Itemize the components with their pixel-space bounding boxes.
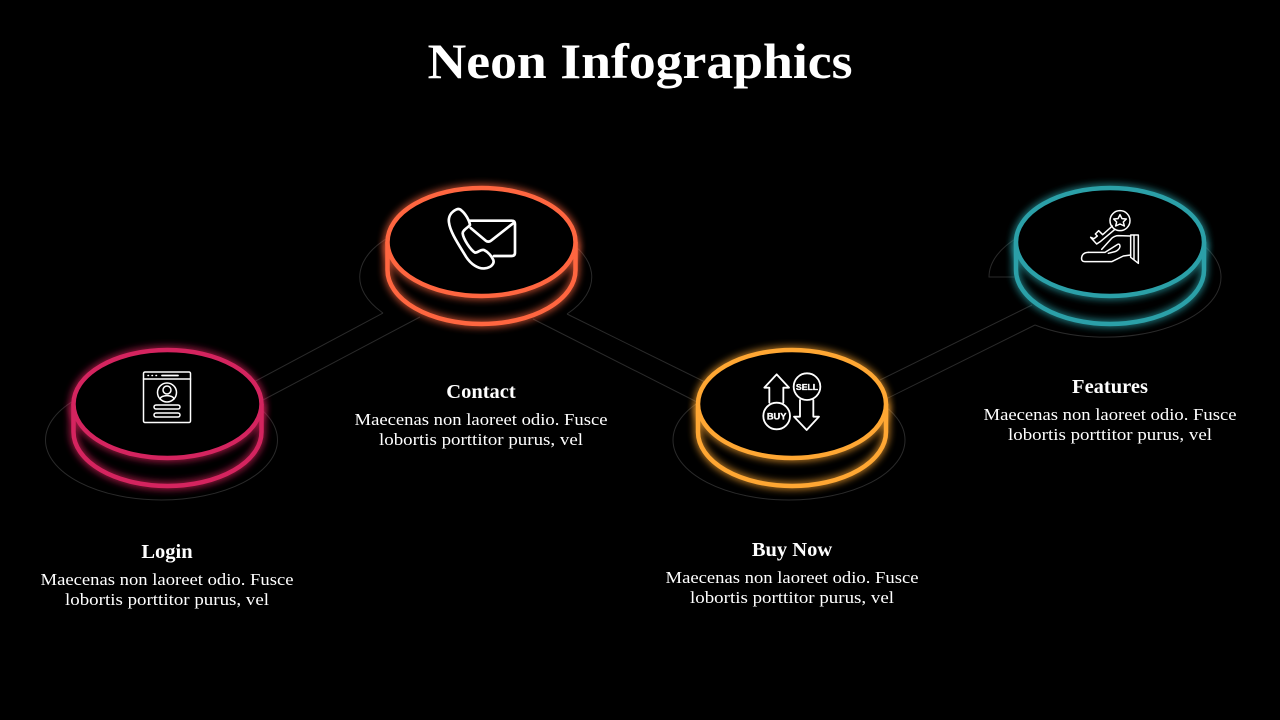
text block: login: lobortis porttitor purus, vel bbox=[65, 590, 269, 609]
icon: buy and sell arrows bbox=[763, 373, 820, 430]
icon: buy and sell arrows: BUY bbox=[767, 411, 787, 421]
text block: buy now bbox=[666, 539, 918, 607]
text block: contact: lobortis porttitor purus, vel bbox=[379, 430, 583, 449]
text block: features: Maecenas non laoreet odio. Fusce bbox=[984, 405, 1236, 424]
text block: contact: Contact bbox=[446, 381, 516, 403]
text block: login: Login bbox=[141, 541, 193, 563]
text block: buy now: Maecenas non laoreet odio. Fusce bbox=[666, 568, 918, 587]
title: Neon Infographics bbox=[428, 33, 852, 89]
text block: buy now: lobortis porttitor purus, vel bbox=[690, 588, 894, 607]
text block: login bbox=[40, 541, 294, 609]
icon: key in hand bbox=[1082, 211, 1138, 263]
icon: phone and envelope bbox=[449, 209, 515, 268]
text block: contact: Maecenas non laoreet odio. Fusce bbox=[354, 410, 608, 429]
text block: features: Features bbox=[1072, 376, 1148, 398]
disk: buy now bbox=[698, 350, 886, 486]
disk: login bbox=[74, 350, 262, 486]
text block: buy now: Buy Now bbox=[752, 539, 832, 561]
text block: contact bbox=[354, 381, 608, 449]
text block: login: Maecenas non laoreet odio. Fusce bbox=[40, 570, 294, 589]
icon: login profile window bbox=[144, 372, 190, 422]
text block: features: lobortis porttitor purus, vel bbox=[1008, 425, 1212, 444]
disk: contact bbox=[388, 188, 576, 324]
connector lines and base rings bbox=[46, 217, 1221, 500]
icon: buy and sell arrows: SELL bbox=[796, 382, 819, 392]
text block: features bbox=[984, 376, 1236, 444]
disk: features bbox=[1016, 188, 1204, 324]
